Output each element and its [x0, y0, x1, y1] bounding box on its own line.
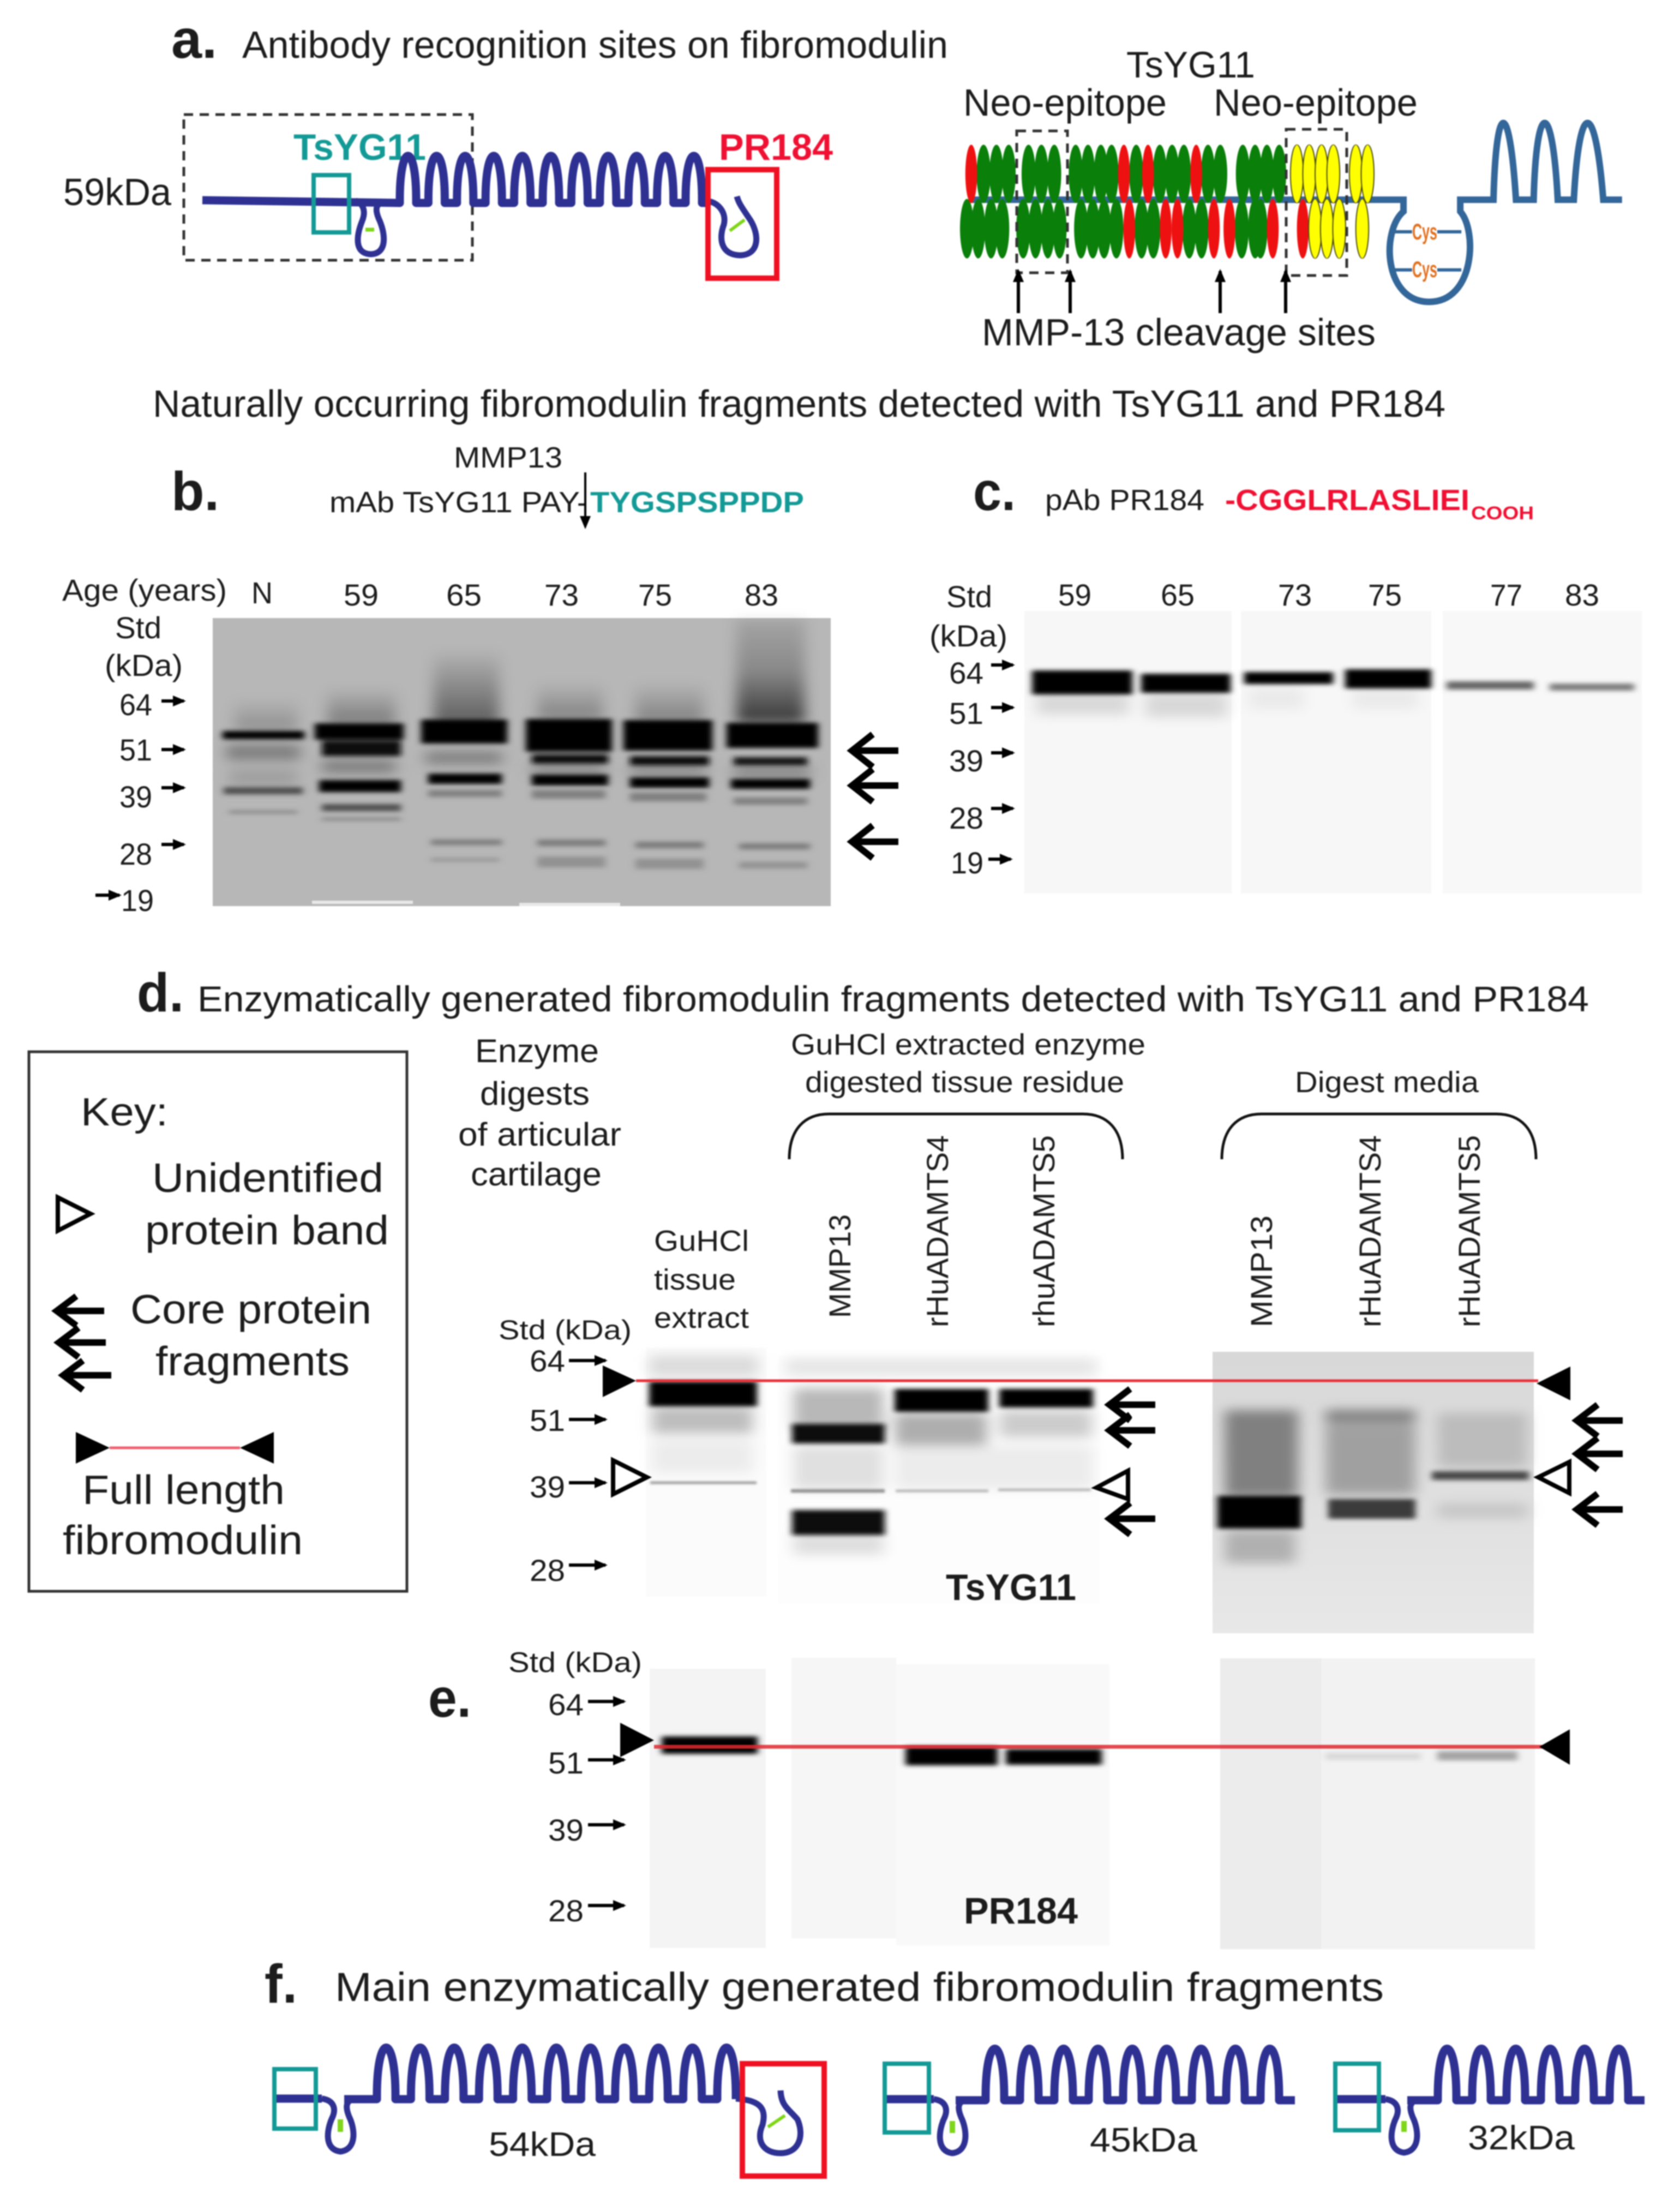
axis: molecular weight labels: (kDa): [105, 648, 183, 682]
arrows: fragment bands d: [1109, 1389, 1623, 1535]
heading: panel f: [265, 1954, 1384, 2015]
heading: panel d: d.: [137, 962, 184, 1023]
labels: Cys disulfide: [1412, 219, 1437, 282]
axis: sample ages: [1058, 578, 1599, 612]
heading: panel a: Antibody recognition sites on fibromodulin: [242, 23, 948, 66]
label: enzyme digests: cartilage: [471, 1156, 602, 1193]
axis: molecular weight labels: 28: [530, 1553, 565, 1587]
icon: full length marker: [76, 1432, 274, 1464]
axis: molecular weight labels: [95, 610, 184, 918]
axis: age labels: Age (years): [62, 573, 227, 607]
axis: sample ages: 75: [1368, 578, 1402, 612]
diagram: fibromodulin protein coil: [202, 156, 757, 255]
sequence: PR184 epitope: -CGGLRLASLIEI: [1225, 484, 1469, 517]
axis: age labels: 75: [638, 578, 672, 612]
heading: panel c: c.: [973, 461, 1016, 522]
heading: panel f: f.: [265, 1954, 297, 2015]
marker: right filled triangle e: [1539, 1729, 1570, 1765]
line: full length red marker e: [654, 1745, 1550, 1749]
axis: age labels: 59: [344, 578, 379, 612]
label: 59kDa: 59kDa: [63, 171, 171, 213]
label: TsYG11 neo-epitope: TsYG11: [1126, 44, 1255, 86]
sequence: PR184 epitope: COOH: [1471, 503, 1534, 524]
axis: molecular weight labels: 19: [121, 883, 154, 918]
label: enzyme digests: of articular: [458, 1116, 621, 1153]
axis: molecular weight labels: Std (kDa): [499, 1315, 632, 1345]
axis: sample ages: 77: [1490, 578, 1522, 612]
marker: left filled triangle e: [620, 1723, 654, 1757]
axis: molecular weight labels: 28: [119, 837, 152, 871]
marker: open triangles d: [613, 1460, 1569, 1499]
gel: panel b blot: [213, 618, 831, 906]
key text: full length: fibromodulin: [63, 1517, 303, 1563]
axis: molecular weight labels: 39: [548, 1813, 584, 1847]
fragment: 32kDa: [1335, 2049, 1645, 2157]
axis: molecular weight labels: 39: [949, 744, 983, 778]
axis: molecular weight labels: 51: [530, 1403, 565, 1437]
axis: molecular weight labels: 39: [530, 1470, 565, 1504]
label: GuHCl extracted residue: GuHCl extracted enzyme: [791, 1028, 1145, 1061]
heading: panel a: [171, 9, 948, 70]
label: enzyme digests: digests: [480, 1075, 590, 1112]
lane labels: rotated enzymes: rhuADAMTS5: [1027, 1135, 1061, 1327]
teal box: TsYG11 site: [314, 175, 349, 232]
label: MMP13: MMP13: [454, 441, 562, 474]
gel: panel c blot: [1024, 611, 1642, 894]
lane labels: rotated enzymes: [823, 1135, 1486, 1327]
axis: sample ages: 65: [1161, 578, 1195, 612]
sequence: PR184 epitope: [1045, 484, 1534, 524]
diagram: fibromodulin LRR structure: [960, 123, 1622, 302]
fragment: 54kDa: [274, 2048, 824, 2176]
panel e: PR184 blot: [428, 1647, 1570, 1949]
arrows: MMP-13 cleavage: [1018, 271, 1286, 313]
sequence: PR184 epitope: pAb PR184: [1045, 484, 1204, 517]
heading: panel a: a.: [171, 9, 217, 70]
gel: GuHCl tissue extract: [646, 1348, 766, 1597]
line: full length red marker d: [636, 1379, 1538, 1382]
heading: panel b: b.: [171, 461, 219, 522]
dashed box: N-terminal region: [184, 115, 472, 260]
gel: digest media: [1213, 1352, 1534, 1633]
label: left neo-epitope: Neo-epitope: [963, 81, 1167, 124]
axis: molecular weight labels: 51: [119, 733, 152, 767]
axis: age labels: 73: [544, 578, 579, 612]
panel a: antibody recognition sites: [63, 9, 1622, 353]
heading: panel f: Main enzymatically generated fibromodulin fragments: [335, 1964, 1384, 2010]
axis: molecular weight labels: 64: [949, 656, 983, 690]
marker: right filled triangle d: [1537, 1367, 1570, 1400]
axis: molecular weight labels: 51: [548, 1746, 584, 1780]
label: enzyme digests: Enzyme: [475, 1033, 599, 1069]
fragment: 45kDa: [885, 2049, 1295, 2159]
brackets: sample groups: [789, 1114, 1536, 1159]
red box: PR184 site: [708, 170, 777, 278]
axis: sample ages: 83: [1565, 578, 1599, 612]
key text: unidentified band: Unidentified: [152, 1155, 383, 1201]
key text: unidentified band: protein band: [145, 1207, 389, 1253]
axis: molecular weight labels: (kDa): [929, 619, 1007, 653]
icon: open triangle: [58, 1197, 91, 1231]
label: TsYG11: TsYG11: [293, 127, 426, 168]
key text: full length: Full length: [82, 1467, 285, 1513]
icon: stacked arrows: [57, 1296, 111, 1390]
axis: molecular weight labels: 51: [949, 696, 983, 730]
sequence: TsYG11 epitope: [329, 486, 804, 519]
fragment: 32kDa: 32kDa: [1468, 2119, 1575, 2157]
label: digest media: Digest media: [1295, 1066, 1479, 1099]
axis: molecular weight labels: 28: [949, 801, 983, 835]
gel: PR184 blots: [650, 1658, 1535, 1949]
dashed boxes: neo-epitope regions: [1017, 129, 1347, 275]
lane labels: rotated enzymes: rHuADAMTS4: [1353, 1135, 1387, 1327]
heading: panel d: [137, 962, 1589, 1023]
fragment: 45kDa: 45kDa: [1090, 2122, 1198, 2159]
panel: key: [29, 1052, 407, 1591]
sequence: TsYG11 epitope: TYGSPSPPDP: [590, 486, 804, 519]
labels: Cys disulfide: Cys: [1412, 256, 1437, 282]
lane labels: rotated enzymes: rHuADAMTS4: [920, 1135, 955, 1327]
arrows: core protein fragments: [852, 734, 898, 858]
panel d: enzymatically generated fragments, TsYG11: [29, 962, 1623, 1633]
heading: panel d: Enzymatically generated fibromodulin fragments detected with TsYG11 and PR184: [197, 979, 1589, 1019]
label: right neo-epitope: Neo-epitope: [1214, 81, 1418, 124]
key text: full length: [63, 1467, 303, 1563]
axis: molecular weight labels: Std: [115, 610, 161, 645]
label: GuHCl tissue extract: tissue: [654, 1263, 736, 1296]
key text: unidentified band: [145, 1155, 389, 1253]
axis: molecular weight labels: 19: [951, 846, 983, 880]
heading: naturally occurring fragments: Naturally occurring fibromodulin fragments detected with TsYG11 and PR184: [153, 382, 1445, 425]
axis: molecular weight labels: Std: [946, 579, 992, 614]
axis: age labels: 65: [446, 578, 482, 612]
label: PR184 blot: PR184: [964, 1890, 1078, 1932]
key text: core fragments: Core protein: [130, 1286, 371, 1332]
label: GuHCl extracted residue: [791, 1028, 1145, 1099]
marker: left filled triangle d: [603, 1365, 636, 1397]
panel b: TsYG11 western blot: [62, 441, 898, 918]
axis: molecular weight labels: 64: [119, 687, 152, 722]
axis: molecular weight labels: 39: [119, 780, 152, 814]
gel: digested tissue residue: [778, 1356, 1100, 1604]
axis: molecular weight labels: [499, 1315, 632, 1587]
axis: molecular weight labels: [929, 579, 1013, 880]
axis: age labels: [62, 573, 778, 612]
axis: sample ages: 59: [1058, 578, 1091, 612]
label: GuHCl extracted residue: digested tissue residue: [805, 1066, 1124, 1099]
axis: age labels: N: [251, 576, 273, 610]
sequence: TsYG11 epitope: mAb TsYG11 PAY-: [329, 486, 587, 519]
labels: Cys disulfide: Cys: [1412, 219, 1437, 244]
key text: core fragments: [130, 1286, 371, 1384]
lane labels: rotated enzymes: rHuADAMTS5: [1452, 1135, 1486, 1327]
label: PR184: PR184: [719, 127, 833, 168]
lane labels: rotated enzymes: MMP13: [1244, 1215, 1279, 1327]
axis: molecular weight labels: [508, 1647, 642, 1928]
label: TsYG11 blot: TsYG11: [946, 1567, 1076, 1608]
lane labels: rotated enzymes: MMP13: [823, 1214, 857, 1318]
label: enzyme digests: [458, 1033, 621, 1193]
key text: core fragments: fragments: [155, 1338, 350, 1384]
axis: molecular weight labels: 64: [548, 1687, 584, 1722]
arrow: cleavage point: [584, 472, 586, 527]
axis: molecular weight labels: 64: [530, 1344, 565, 1378]
axis: molecular weight labels: Std (kDa): [508, 1647, 642, 1679]
key title: Key:: [81, 1090, 168, 1134]
label: MMP-13 cleavage sites: MMP-13 cleavage sites: [982, 311, 1376, 353]
fragment: 54kDa: 54kDa: [489, 2126, 596, 2164]
panel f: main fragments: [265, 1954, 1645, 2176]
axis: age labels: 83: [745, 578, 778, 612]
axis: sample ages: 73: [1278, 578, 1312, 612]
axis: molecular weight labels: 28: [548, 1894, 584, 1928]
heading: panel e: e.: [428, 1668, 471, 1729]
label: GuHCl tissue extract: [654, 1225, 749, 1334]
panel c: PR184 western blot: [929, 461, 1642, 894]
label: GuHCl tissue extract: extract: [654, 1302, 749, 1334]
label: GuHCl tissue extract: GuHCl: [654, 1225, 749, 1257]
